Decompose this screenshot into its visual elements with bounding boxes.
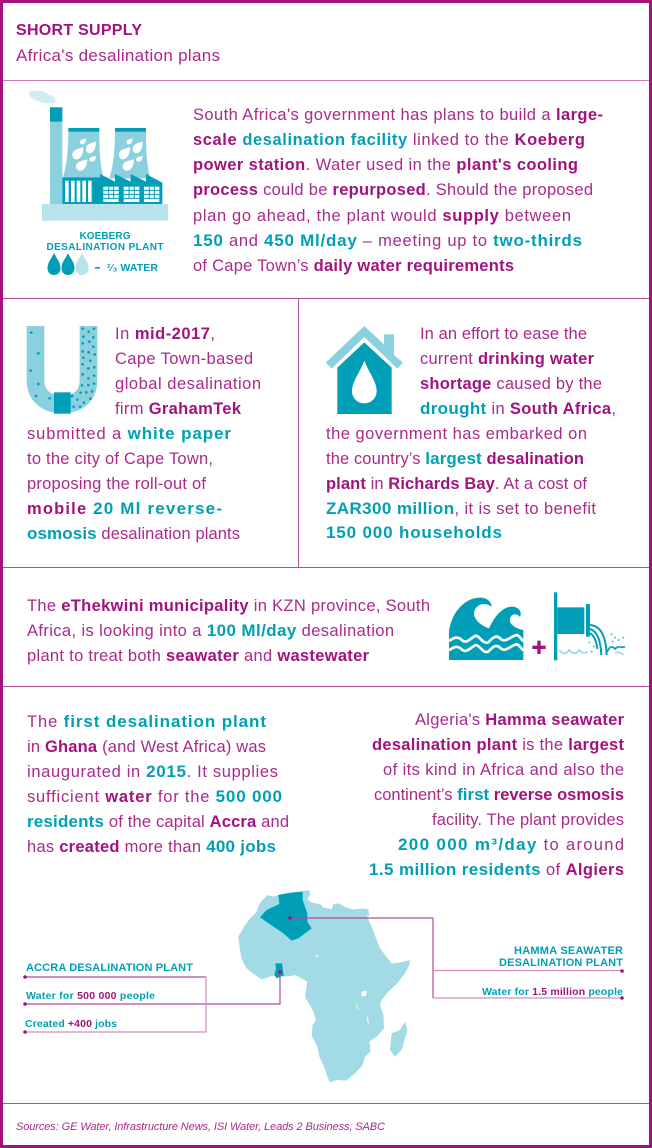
title: Africa's desalination plans (16, 46, 220, 65)
text: eThekwini: plant to treat both seawater and wastewater (27, 647, 370, 665)
text: Hamma plant: facility. The plant provides (432, 811, 624, 829)
text: Hamma plant: of its kind in Africa and also the (383, 761, 624, 779)
text: GrahamTek: Cape Town-based (115, 350, 253, 368)
text: Hamma plant: Algeria's Hamma seawater (415, 711, 625, 729)
label: Accra plant: ACCRA DESALINATION PLANT (26, 962, 193, 974)
text: Hamma plant: continent’s first reverse osmosis (374, 785, 624, 804)
text: GrahamTek: submitted a white paper (27, 424, 231, 443)
label: Hamma plant: DESALINATION PLANT (499, 957, 623, 969)
text: GrahamTek: In mid-2017, (115, 325, 215, 343)
text: GrahamTek: to the city of Cape Town, (27, 450, 213, 468)
icon: house with water drop (326, 326, 403, 414)
plant label (46, 231, 164, 275)
text: GrahamTek: firm GrahamTek (115, 400, 242, 418)
text: GrahamTek: mobile 20 Ml reverse- (27, 499, 222, 518)
text: Richards Bay: shortage caused by the (420, 375, 602, 393)
text: eThekwini: The eThekwini municipality in KZN province, South (27, 597, 430, 615)
callout lines: Accra (23, 970, 282, 1034)
text: Richards Bay (326, 325, 616, 542)
label: Hamma plant: Water for 1.5 million people (482, 986, 623, 998)
sources: Sources: GE Water, Infrastructure News, ISI Water, Leads 2 Business, SABC (16, 1121, 385, 1133)
text: GrahamTek: global desalination (115, 375, 261, 393)
text: GrahamTek: osmosis desalination plants (27, 524, 240, 543)
map of Africa (238, 890, 410, 1082)
plant label: ²⁄₃ WATER (107, 262, 158, 274)
text: Richards Bay: drought in South Africa, (420, 399, 616, 418)
text: Richards Bay: the country’s largest desalination (326, 449, 584, 468)
text: Hamma plant: desalination plant is the largest (372, 736, 624, 754)
text: Ghana plant: residents of the capital Accra and (27, 812, 289, 831)
label: Accra plant: Water for 500 000 people (26, 990, 155, 1002)
text: Hamma plant (369, 711, 625, 879)
title (16, 22, 220, 65)
text: Koeberg plan: South Africa's government has plans to build a large- (193, 106, 603, 124)
text: GrahamTek: proposing the roll-out of (27, 475, 206, 493)
plant label: KOEBERG (80, 231, 131, 242)
text: Hamma plant: 1.5 million residents of Algiers (369, 860, 624, 879)
text: Richards Bay: current drinking water (420, 350, 595, 368)
text: Ghana plant: in Ghana (and West Africa) was (27, 738, 266, 756)
text: Richards Bay: 150 000 households (326, 523, 502, 542)
text: eThekwini (27, 597, 430, 665)
text: Richards Bay: plant in Richards Bay. At a cost of (326, 475, 587, 493)
text: Hamma plant: 200 000 m³/day to around (398, 835, 624, 854)
text: GrahamTek (27, 325, 261, 543)
plant label: DESALINATION PLANT (46, 242, 164, 253)
text: Koeberg plan: plan go ahead, the plant would supply between (193, 207, 571, 225)
label: Accra plant: Created +400 jobs (25, 1018, 117, 1030)
icon: Koeberg desalination plant (29, 90, 168, 221)
title: SHORT SUPPLY (16, 22, 142, 39)
label: Accra plant (25, 962, 193, 1030)
label: Hamma plant (482, 945, 623, 998)
label: Hamma plant: HAMMA SEAWATER (514, 945, 623, 957)
text: Richards Bay: the government has embarked on (326, 425, 587, 443)
text: eThekwini: Africa, is looking into a 100 Ml/day desalination (27, 621, 394, 640)
text: Richards Bay: In an effort to ease the (420, 325, 587, 343)
icon: U-shaped pipe (29, 326, 96, 414)
text: Ghana plant: The first desalination plant (27, 712, 266, 731)
text: Ghana plant: inaugurated in 2015. It supplies (27, 762, 278, 781)
icon: seawater plus wastewater (449, 592, 625, 660)
text: Richards Bay: ZAR300 million, it is set to benefit (326, 499, 596, 518)
callout lines: Hamma (288, 916, 624, 1000)
text: Koeberg plan: process could be repurposed. Should the proposed (193, 181, 593, 199)
text: Koeberg plan: scale desalination facility linked to the Koeberg (193, 131, 585, 149)
text: Koeberg plan: of Cape Town’s daily water requirements (193, 257, 514, 275)
text: Koeberg plan (193, 106, 603, 275)
text: Ghana plant: has created more than 400 jobs (27, 837, 276, 856)
text: Ghana plant: sufficient water for the 500 000 (27, 787, 282, 806)
text: Koeberg plan: power station. Water used in the plant's cooling (193, 156, 578, 174)
text: Koeberg plan: 150 and 450 Ml/day – meeting up to two-thirds (193, 231, 582, 250)
text: Ghana plant (27, 712, 289, 856)
